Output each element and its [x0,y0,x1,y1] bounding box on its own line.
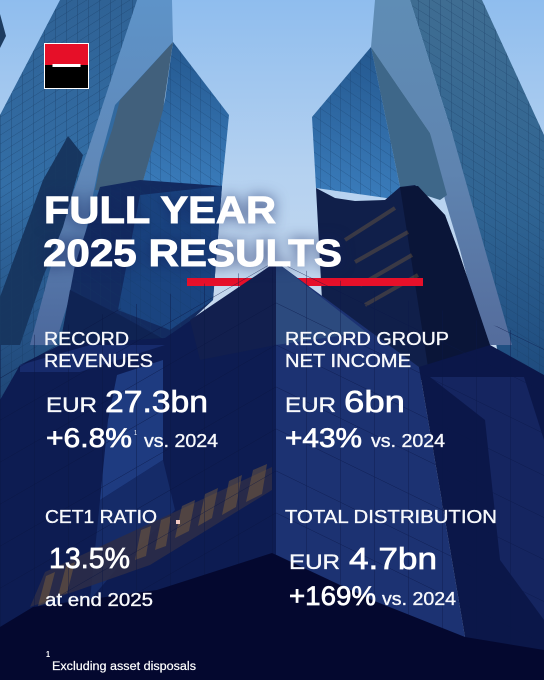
panel: total distribution: EUR [289,551,340,574]
accent bar [187,278,423,286]
panel: total distribution: +169% [289,581,376,611]
logo [44,43,89,89]
title: 2025 RESULTS [43,233,342,275]
panel: record group net income: vs. 2024 [371,431,445,451]
panel: record revenues: REVENUES [44,351,153,371]
background: front building [0,262,544,680]
panel: record group net income: 6bn [344,384,405,419]
background: right tower [276,0,544,420]
panel: record group net income: EUR [285,394,336,417]
panel: record revenues: vs. 2024 [144,431,218,451]
panel: record group net income: +43% [285,423,362,453]
background: left tower [0,0,229,420]
panel: record revenues: 27.3bn [105,384,208,419]
heading: cet1 ratio: CET1 RATIO [45,507,157,527]
panel: record revenues: +6.8% [46,423,132,453]
marker: small dot [176,520,180,524]
panel: total distribution: 4.7bn [349,541,437,576]
panel: cet1 ratio: 13.5% [49,543,130,575]
title [43,190,342,275]
panel: total distribution [285,507,497,611]
panel: total distribution: vs. 2024 [382,589,456,609]
panel: record revenues: 1 [134,430,137,437]
panel: record revenues: EUR [46,394,97,417]
panel: cet1 ratio: at end 2025 [45,590,153,610]
heading: record group net income: RECORD GROUP [285,329,449,349]
heading: record revenues: RECORD [44,329,129,349]
footnote: 1 [46,650,50,659]
footnote: Excluding asset disposals [52,661,196,673]
footnote [46,650,196,673]
panel: cet1 ratio [45,507,157,610]
panel: record revenues [44,329,218,453]
panel: record group net income: NET INCOME [285,351,411,371]
heading: total distribution: TOTAL DISTRIBUTION [285,507,497,527]
title: FULL YEAR [44,190,276,232]
panel: record group net income [285,329,449,453]
